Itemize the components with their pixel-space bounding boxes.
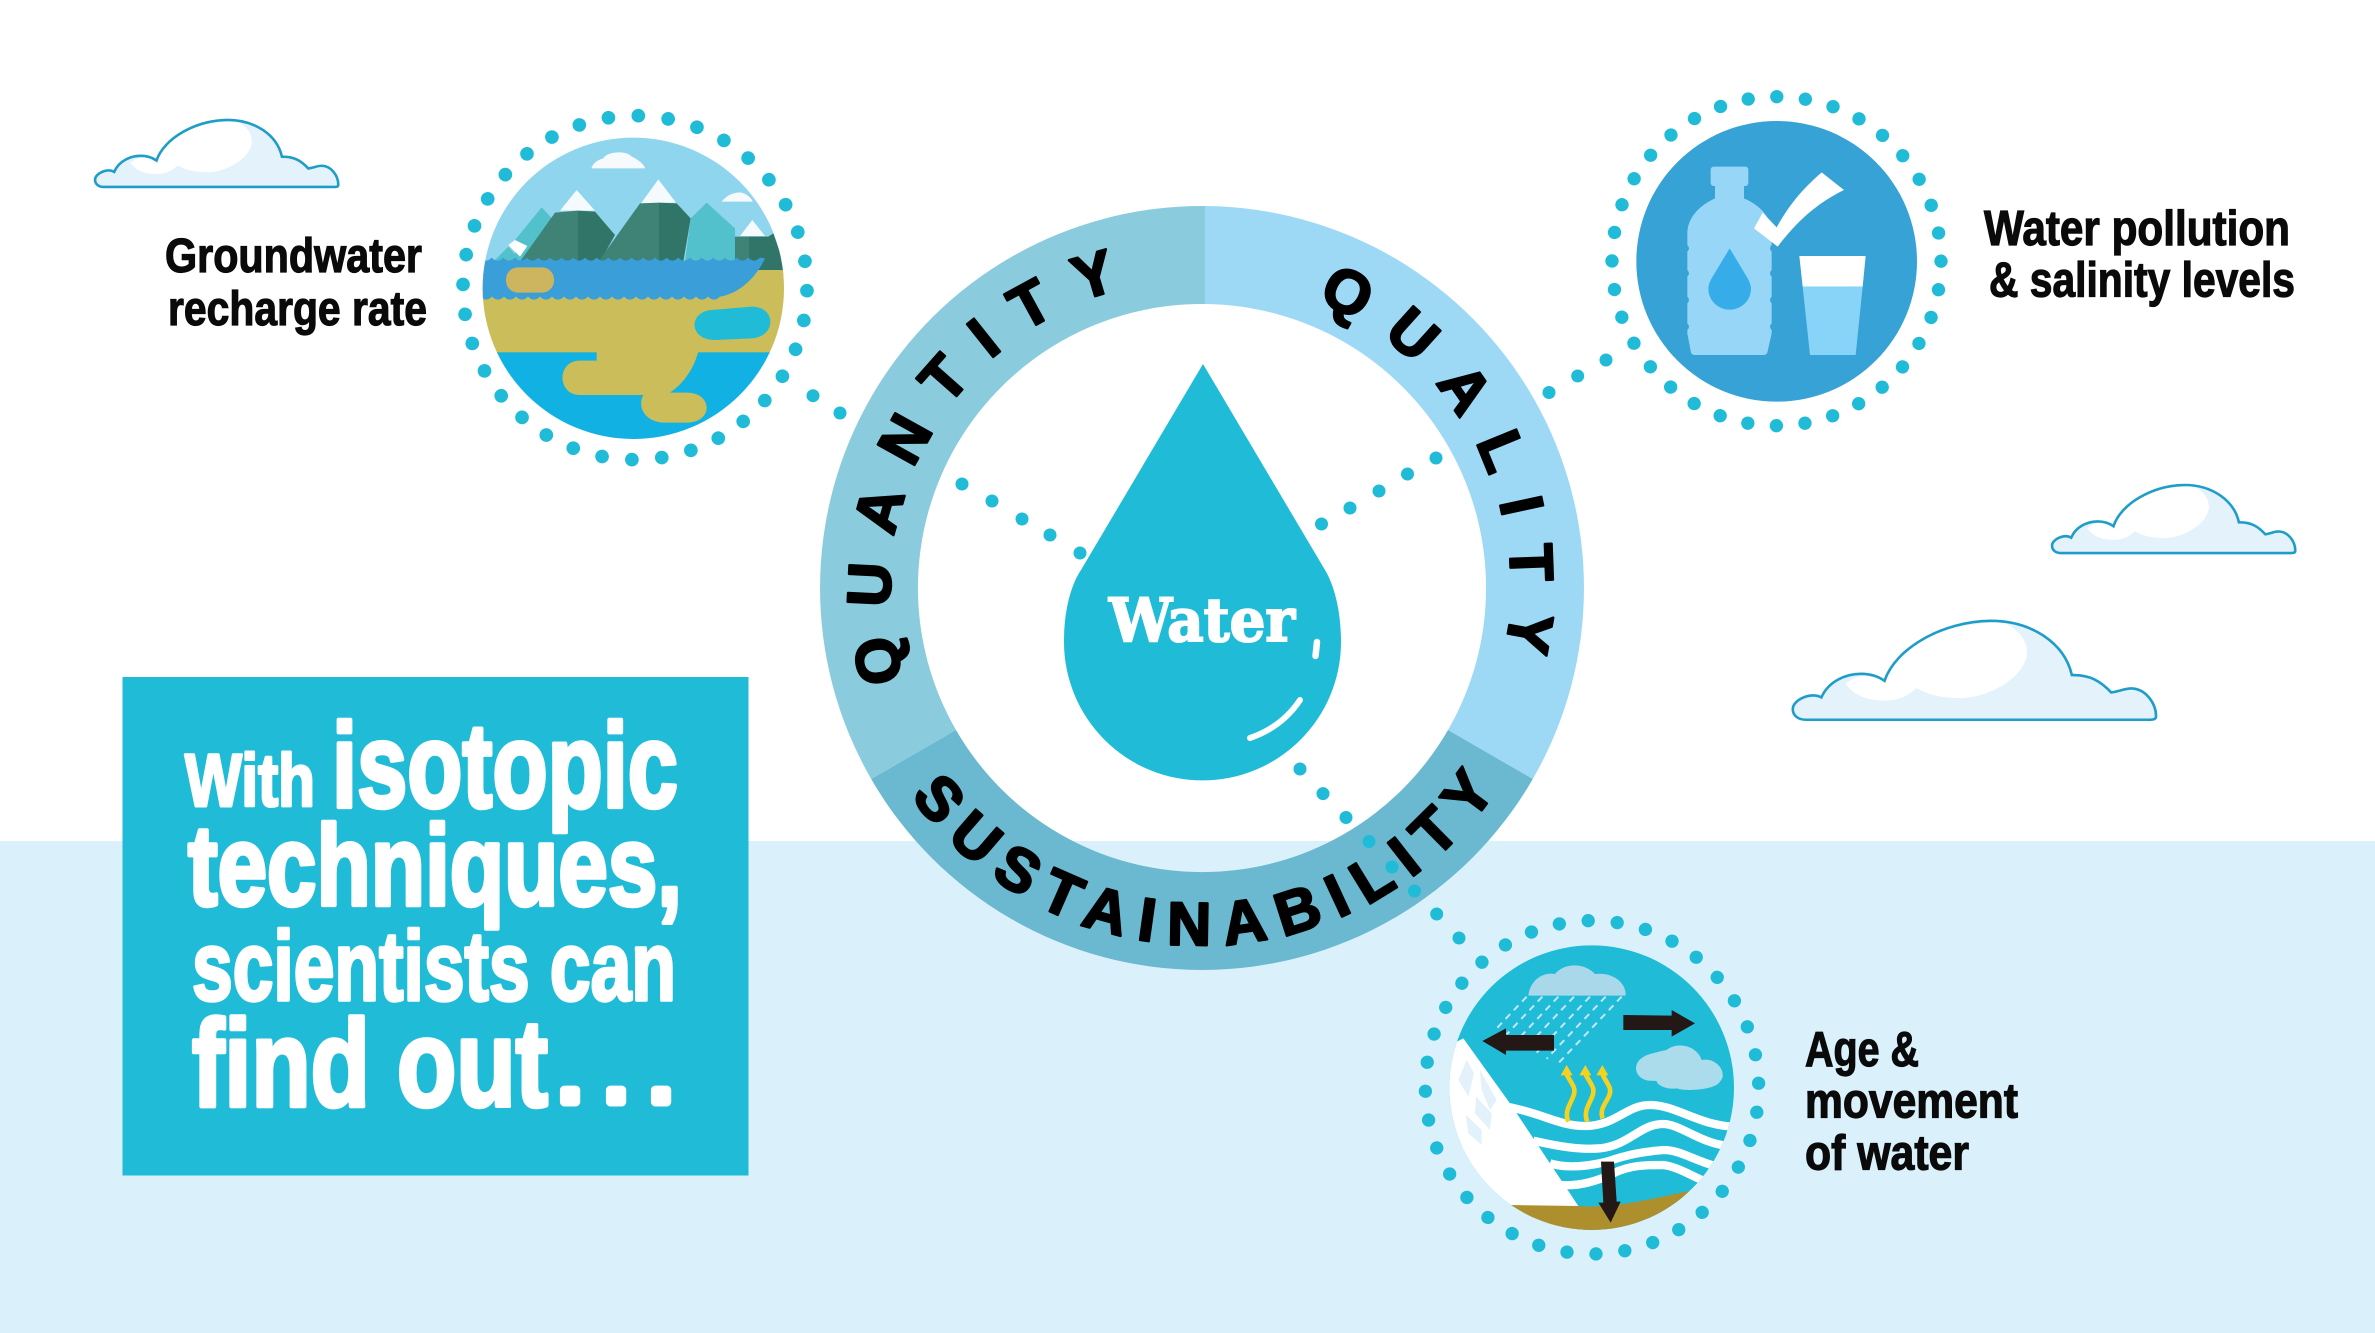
central water drop — [1064, 364, 1341, 780]
ring label: quantity: QUANTITY — [846, 248, 1108, 684]
background: white sky — [0, 0, 2375, 841]
cloud: top left — [95, 120, 338, 187]
heading: with isotopic techniques, scientists can find out: find out — [192, 996, 548, 1133]
heading: with isotopic techniques, scientists can find out: scientists can — [192, 911, 676, 1021]
heading: with isotopic techniques, scientists can find out — [185, 699, 682, 1133]
label: water pollution and salinity levels: Water pollution — [1984, 202, 2290, 256]
icon: groundwater landscape — [460, 113, 810, 463]
heading: with isotopic techniques, scientists can find out: isotopic — [332, 699, 678, 833]
icon: water cycle — [1421, 917, 1763, 1258]
panel: intro text box — [122, 677, 748, 1176]
label: water pollution and salinity levels: & salinity levels — [1989, 254, 2295, 308]
heading: with isotopic techniques, scientists can find out: ... — [559, 1030, 672, 1119]
ring label: quality: QUALITY — [1324, 268, 1554, 657]
icon: bottle and glass — [1612, 97, 1941, 426]
drop label: water: Water — [1108, 586, 1296, 656]
ring: sustainability segment — [871, 730, 1533, 970]
label: groundwater recharge rate — [165, 230, 427, 336]
label: age and movement of water: Age & — [1805, 1023, 1919, 1077]
label: water pollution and salinity levels — [1984, 202, 2295, 308]
label: age and movement of water — [1805, 1023, 2018, 1180]
heading: with isotopic techniques, scientists can find out: techniques, — [188, 803, 682, 930]
label: age and movement of water: movement — [1805, 1074, 2018, 1128]
heading: with isotopic techniques, scientists can find out: With — [185, 739, 315, 822]
ring label: sustainability: SUSTAINABILITY — [915, 765, 1488, 946]
cloud: right small — [2052, 485, 2295, 553]
background: pale blue lower band — [0, 841, 2375, 1333]
label: age and movement of water: of water — [1805, 1126, 1969, 1180]
label: groundwater recharge rate: recharge rate — [168, 283, 427, 336]
connector dots — [806, 354, 1612, 944]
label: groundwater recharge rate: Groundwater — [165, 230, 422, 283]
cloud: right large — [1793, 621, 2156, 720]
ring: quality segment — [1205, 206, 1584, 779]
ring: quantity segment — [820, 206, 1205, 779]
